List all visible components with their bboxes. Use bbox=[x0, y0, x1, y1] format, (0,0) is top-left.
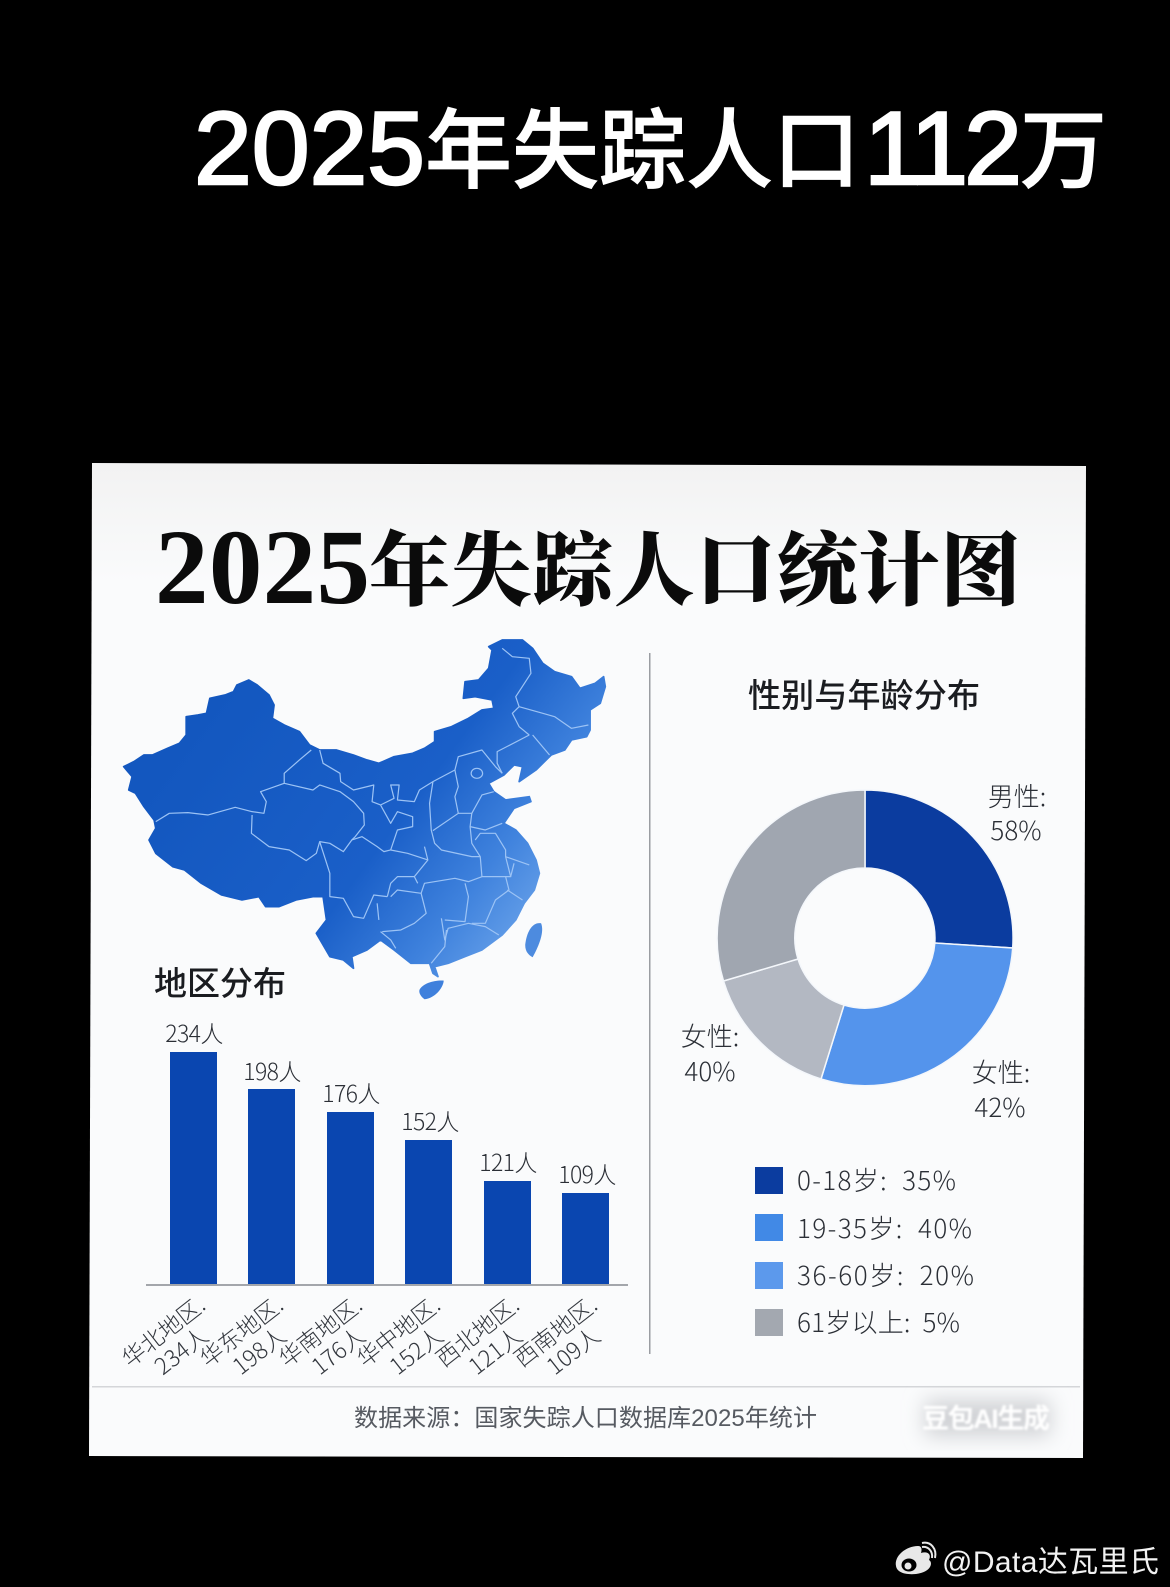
map of China by province bbox=[124, 640, 605, 999]
bar: 华中地区 bbox=[401, 1103, 459, 1285]
data source footer: 数据来源：国家失踪人口数据库2025年统计 bbox=[354, 1405, 817, 1432]
slice: light grey bbox=[724, 959, 844, 1079]
donut label: female right: 女性: bbox=[972, 1053, 1030, 1090]
card heading bbox=[155, 509, 1021, 627]
axis label: 华中地区: 华中地区. bbox=[348, 1287, 446, 1374]
bar: 西北地区: 121人 bbox=[479, 1144, 537, 1178]
bar: 华南地区 bbox=[322, 1075, 380, 1285]
Hainan bbox=[419, 981, 444, 999]
page title: 年失踪人口 bbox=[425, 103, 860, 200]
legend item 0-18: 0-18岁: 35% bbox=[797, 1161, 956, 1198]
axis label: 华北地区: 234人 bbox=[146, 1318, 214, 1381]
axis label: 华南地区: 176人 bbox=[303, 1318, 371, 1381]
slice: mid blue bbox=[821, 943, 1013, 1086]
AI watermark: 豆包AI生成 bbox=[922, 1404, 1050, 1434]
axis label: 西南地区: 西南地区. bbox=[505, 1287, 603, 1374]
bar: 华东地区 bbox=[243, 1053, 301, 1285]
donut label: female left: 女性: bbox=[681, 1017, 739, 1054]
donut label: male: 58% bbox=[990, 811, 1042, 848]
donut label: male bbox=[988, 777, 1046, 848]
card heading: 2025 bbox=[155, 509, 370, 627]
slice: grey bbox=[717, 790, 865, 981]
bar: 华北地区 bbox=[165, 1015, 223, 1285]
donut label: male: 男性: bbox=[988, 777, 1046, 814]
donut label: female left: 40% bbox=[684, 1052, 736, 1089]
donut chart: gender and age bbox=[717, 790, 1013, 1086]
bar: 华北地区: 234人 bbox=[165, 1015, 223, 1049]
page title: 112 bbox=[864, 91, 1022, 207]
donut label: female right: 42% bbox=[974, 1088, 1026, 1125]
legend item 36-60: 36-60岁: 20% bbox=[797, 1256, 974, 1293]
slice: dark blue bbox=[865, 790, 1013, 948]
icon: weibo bbox=[896, 1543, 935, 1574]
bar: 华中地区: 152人 bbox=[401, 1103, 459, 1137]
bar: 华南地区: 176人 bbox=[322, 1075, 380, 1109]
Taiwan bbox=[525, 923, 542, 957]
axis label: 西北地区: 西北地区. bbox=[427, 1287, 525, 1374]
axis label: 华东地区: 华东地区. bbox=[191, 1287, 289, 1374]
axis label: 华中地区: 152人 bbox=[381, 1318, 449, 1381]
weibo watermark: @Data达瓦里氏 bbox=[942, 1546, 1159, 1579]
bar chart: regional distribution bbox=[113, 1015, 628, 1381]
legend: age groups bbox=[755, 1161, 974, 1340]
axis label: 西北地区: 121人 bbox=[460, 1318, 528, 1381]
panel: statistics card bbox=[89, 463, 1086, 1458]
section heading: regional distribution: 地区分布 bbox=[154, 965, 286, 1002]
card heading: 年失踪人口统计图 bbox=[369, 527, 1021, 617]
legend item 61+: 61岁以上: 5% bbox=[797, 1303, 960, 1340]
bar: 华东地区: 198人 bbox=[243, 1053, 301, 1087]
section heading: gender and age: 性别与年龄分布 bbox=[748, 677, 980, 714]
axis label: 华南地区: 华南地区. bbox=[270, 1287, 368, 1374]
donut label: female right bbox=[972, 1053, 1030, 1125]
axis label: 西南地区: 109人 bbox=[538, 1318, 606, 1381]
page title bbox=[194, 91, 1107, 207]
bar: 西南地区 bbox=[558, 1156, 616, 1285]
legend item 19-35: 19-35岁: 40% bbox=[797, 1209, 972, 1246]
page title: 2025 bbox=[194, 91, 425, 207]
page title: 万 bbox=[1020, 103, 1107, 200]
bar: 西北地区 bbox=[479, 1144, 537, 1285]
donut label: female left bbox=[681, 1017, 739, 1089]
bar: 西南地区: 109人 bbox=[558, 1156, 616, 1190]
axis label: 华北地区: 华北地区. bbox=[113, 1287, 211, 1374]
province borders bbox=[156, 648, 588, 963]
axis label: 华东地区: 198人 bbox=[224, 1318, 292, 1381]
